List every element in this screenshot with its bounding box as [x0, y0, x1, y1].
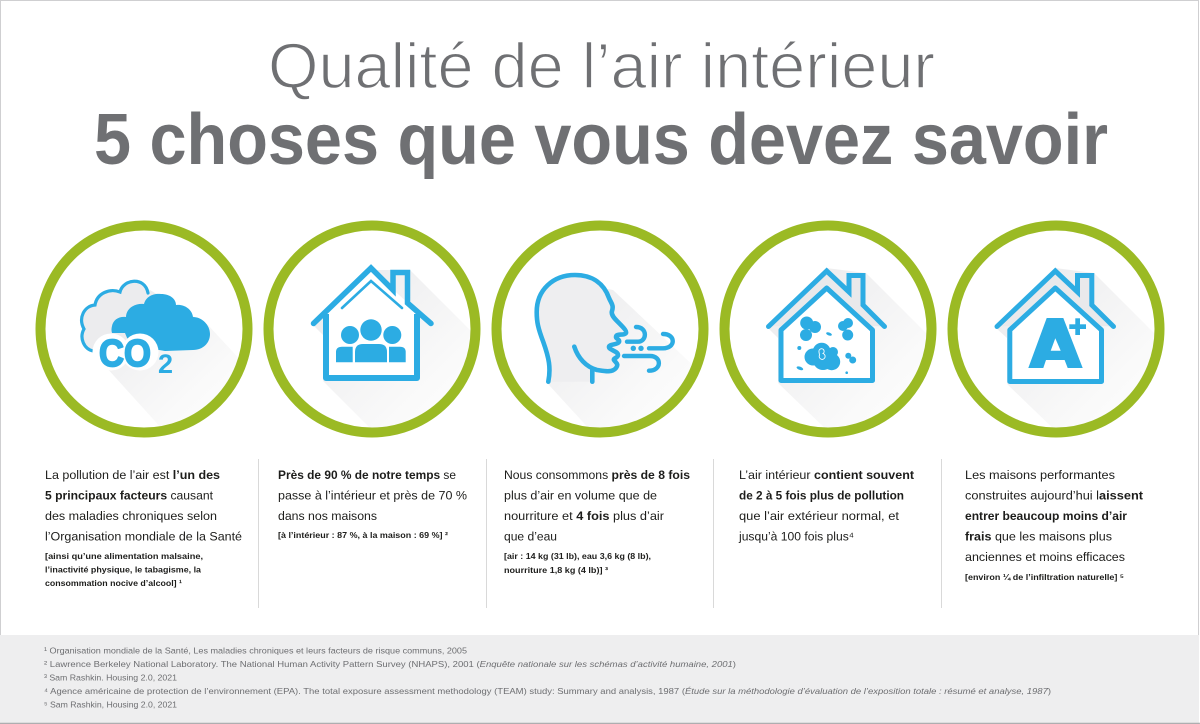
icon: front cloud	[112, 294, 210, 351]
text block: fact 1: l’inactivité physique, le tabagisme, la	[45, 564, 201, 574]
text block: fact 3: plus d’air en volume que de	[504, 489, 657, 503]
icon: house	[314, 268, 431, 378]
icon: people	[336, 319, 406, 362]
references list: ³ Sam Rashkin. Housing 2.0, 2021	[44, 673, 177, 683]
ring	[496, 226, 704, 432]
ring	[268, 226, 476, 432]
text block: fact 5: frais que les maisons plus	[965, 530, 1112, 544]
ring	[40, 226, 248, 432]
text block: fact 2: [à l’intérieur : 87 %, à la maison : 69 %] ²	[278, 530, 448, 540]
text block: fact 3	[504, 468, 690, 575]
text block: fact 3: nourriture 1,8 kg (4 lb)] ³	[504, 565, 608, 575]
icon: mold spots	[796, 316, 856, 374]
icon: A+ grade	[1028, 318, 1086, 368]
icon: house	[768, 271, 884, 380]
text block: fact 3: Nous consommons près de 8 fois	[504, 468, 690, 482]
ring	[724, 226, 932, 432]
text block: fact 4: de 2 à 5 fois plus de pollution	[739, 489, 904, 503]
text block: fact 2: Près de 90 % de notre temps se	[278, 468, 456, 482]
icon: head	[537, 275, 627, 382]
text block: fact 1: [ainsi qu’une alimentation malsaine,	[45, 551, 203, 561]
text block: fact 4	[738, 468, 914, 544]
icon: CO2 label: CO	[99, 333, 151, 375]
panel: CO2 icon circle	[40, 226, 248, 432]
text block: fact 1: l’Organisation mondiale de la Santé	[45, 530, 242, 544]
text block: fact 5	[965, 468, 1143, 582]
ring	[952, 226, 1160, 432]
panel: people in house icon circle	[268, 226, 480, 435]
icon: exhaled air	[624, 327, 673, 371]
icon: back cloud outline	[82, 281, 148, 351]
text block: fact 5: Les maisons performantes	[965, 468, 1115, 482]
references list: ⁵ Sam Rashkin, Housing 2.0, 2021	[44, 700, 177, 710]
text block: fact 1: des maladies chroniques selon	[45, 509, 217, 523]
text block: fact 1: La pollution de l’air est l’un des	[45, 468, 220, 482]
references list	[44, 646, 1051, 710]
text block: fact 3: que d’eau	[504, 530, 557, 544]
text block: fact 2	[278, 468, 467, 540]
text block: fact 4: jusqu’à 100 fois plus⁴	[738, 530, 854, 544]
text block: fact 3: [air : 14 kg (31 lb), eau 3,6 kg (8 lb),	[504, 551, 651, 561]
text block: fact 1: 5 principaux facteurs causant	[45, 489, 214, 503]
text block: fact 4: que l’air extérieur normal, et	[739, 509, 900, 523]
icon: CO2 label	[92, 333, 173, 379]
icon: CO2 label: 2	[158, 349, 173, 379]
references list: ⁴ Agence américaine de protection de l’environnement (EPA). The total exposure assessment methodology (TEAM) study: Summary and analysis, 1987 ( Étude sur la méthodologie d’évaluation de l’exposition totale : résumé et analyse, 1987 )	[44, 686, 1051, 696]
references list: ¹ Organisation mondiale de la Santé, Les maladies chroniques et leurs facteurs de risque communs, 2005	[44, 646, 467, 656]
text block: fact 5: construites aujourd’hui l aissent	[965, 489, 1143, 503]
text block: fact 1: consommation nocive d’alcool] ¹	[45, 578, 182, 588]
panel: references footer	[0, 635, 1200, 723]
title: Qualité de l’air intérieur	[268, 30, 935, 102]
icon: back cloud	[82, 281, 150, 352]
panel: polluted house icon circle	[724, 226, 935, 435]
references list: ² Lawrence Berkeley National Laboratory. The National Human Activity Pattern Survey (NHAPS), 2001 ( Enquête nationale sur les schémas d’activité humaine, 2001 )	[44, 659, 736, 669]
text block: fact 2: passe à l’intérieur et près de 70 %	[278, 489, 467, 503]
text block: fact 5: [environ ¼ de l’infiltration naturelle] ⁵	[965, 572, 1124, 582]
text block: fact 1	[45, 468, 242, 588]
title: 5 choses que vous devez savoir	[94, 100, 1108, 180]
icon: house	[997, 271, 1114, 382]
title	[94, 30, 1108, 180]
text block: fact 5: entrer beaucoup moins d’air	[965, 509, 1127, 523]
panel: A+ house icon circle	[952, 226, 1163, 435]
text block: fact 4: L’air intérieur contient souvent	[739, 468, 914, 482]
text block: fact 3: nourriture et 4 fois plus d’air	[504, 509, 664, 523]
text block: fact 2: dans nos maisons	[278, 509, 377, 523]
panel: breathing icon circle	[496, 226, 704, 432]
text block: fact 5: anciennes et moins efficaces	[965, 550, 1125, 564]
